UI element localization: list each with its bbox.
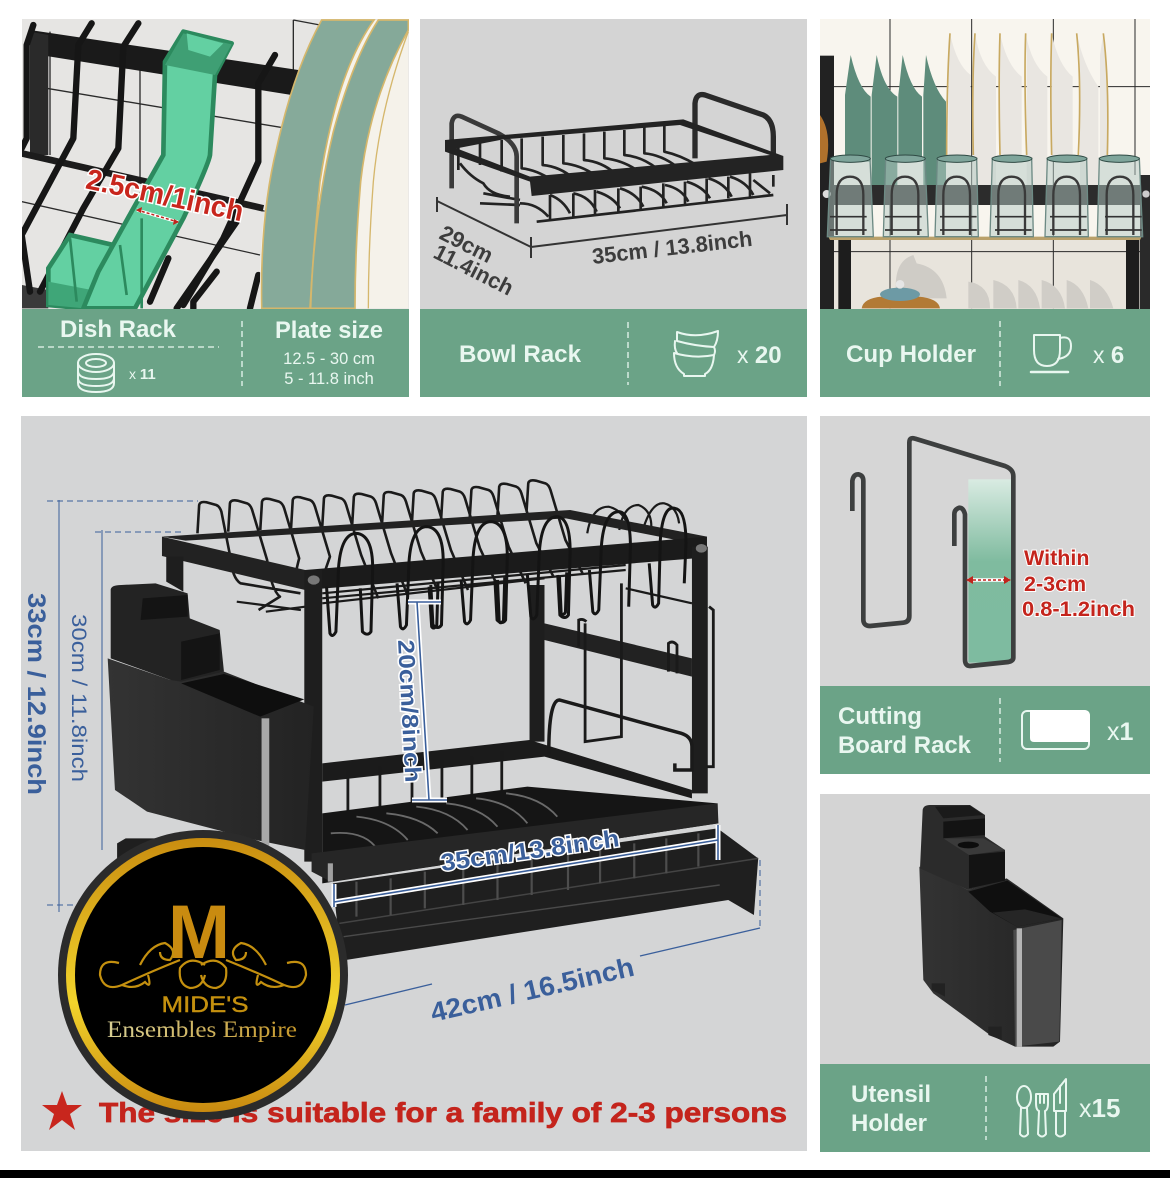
panel: dish rack: [22, 19, 409, 397]
dimension: overall height: 33cm / 12.9inch: [22, 593, 50, 795]
icon: star: [42, 1091, 82, 1130]
heading: cutting board rack: Cutting: [838, 703, 922, 730]
plate size values: 12.5 - 30 cm: [283, 350, 375, 368]
quantity: utensils: x15: [1079, 1093, 1120, 1123]
measurement: slot width: 2.5cm/1inch: [83, 164, 246, 228]
uprights: [166, 547, 708, 862]
dimension: tray width: 35cm/13.8inch: [439, 825, 621, 877]
heading: cup holder: Cup Holder: [846, 341, 976, 368]
caption bar: [820, 309, 1150, 397]
icon: cup: [1031, 335, 1071, 372]
logo tagline: Ensembles Empire: [107, 1017, 297, 1042]
quantity: bowls: x 20: [737, 342, 782, 369]
utensil holder: [108, 583, 314, 850]
heading: plate size: Plate size: [275, 317, 383, 344]
callout: inch: 0.8-1.2inch: [1022, 597, 1135, 621]
icon: cutting board: [1022, 710, 1090, 749]
wire hanger: [852, 438, 1013, 666]
icon: bowls: [674, 331, 718, 376]
logo flourish: [100, 943, 306, 988]
heading: cutting board rack: Board Rack: [838, 732, 972, 759]
photo: cups and plates: [820, 18, 1150, 309]
footer bar: [0, 1170, 1170, 1178]
measurement arrow: [966, 576, 1011, 584]
heading: dish rack: Dish Rack: [60, 316, 177, 343]
illustration: two tier dish rack: [108, 480, 758, 960]
logo name: MIDE'S: [162, 992, 248, 1017]
plate size values: 5 - 11.8 inch: [284, 370, 374, 388]
heading: utensil holder: Holder: [851, 1110, 927, 1137]
green board: [968, 479, 1012, 663]
dimension: overall width: 42cm / 16.5inch: [428, 952, 637, 1028]
dimension: depth: 29cm: [436, 220, 497, 268]
upper tray: [322, 787, 718, 883]
caption bar: [820, 686, 1150, 774]
logo letter: M: [168, 890, 230, 975]
logo badge: [58, 830, 348, 1120]
heading: bowl rack: Bowl Rack: [459, 341, 582, 368]
bottom back frame: [322, 740, 692, 798]
back wires: [197, 480, 583, 610]
dimension lines: [437, 197, 787, 258]
callout: within: Within: [1024, 546, 1089, 570]
illustration: bowl rack: [445, 95, 783, 223]
quantity: cutting board: x1: [1107, 718, 1134, 746]
dimension: depth: 11.4inch: [430, 239, 518, 300]
front loops: [327, 508, 686, 635]
caption bar: [820, 1064, 1150, 1152]
icon: spoon fork knife: [1017, 1079, 1066, 1136]
caption bar: [22, 309, 409, 397]
quantity: plates: x 11: [129, 366, 156, 383]
drip tray: [333, 828, 758, 960]
panel: utensil holder: [820, 794, 1150, 1152]
quantity: cups: x 6: [1093, 342, 1124, 369]
heading: utensil holder: Utensil: [851, 1081, 931, 1108]
note: family size: The size is suitable for a family of 2-3 persons: [99, 1097, 787, 1128]
panel: cutting board rack: [820, 416, 1150, 774]
dimension: clearance: 20cm/8inch: [393, 639, 426, 783]
panel: bowl rack: [420, 19, 807, 397]
dimension: clearance: [393, 602, 447, 800]
dimension: width: 35cm / 13.8inch: [591, 226, 754, 269]
panel: cup holder: [820, 18, 1150, 397]
top frame: [162, 537, 305, 590]
icon: plates: [78, 354, 114, 392]
photo: dish rack close-up: [22, 19, 409, 309]
caption bar: [420, 309, 807, 397]
callout: within: 2-3cm: [1024, 572, 1086, 596]
illustration: utensil holder: [919, 805, 1063, 1047]
dimension guides: [47, 500, 760, 1005]
panel: main dimensions: [21, 416, 807, 1151]
dimension: tray width: [334, 825, 718, 907]
dimension: lower height: 30cm / 11.8inch: [67, 614, 90, 782]
